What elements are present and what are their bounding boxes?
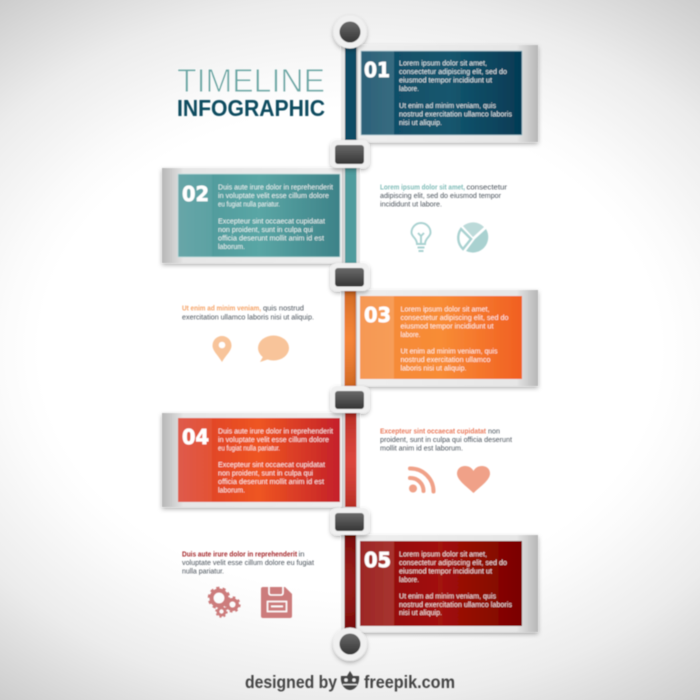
number 03: 03 bbox=[364, 303, 391, 327]
text block 05: consectetur adipiscing elit, sed do bbox=[399, 560, 507, 567]
title: TIMELINE bbox=[177, 62, 325, 99]
text block 03: laboris nisi ut aliquip. bbox=[400, 366, 467, 372]
connector 2 bbox=[331, 263, 369, 291]
side text: step 02: consectetur bbox=[466, 184, 508, 192]
side text: step 04 bbox=[380, 428, 512, 452]
side text: step 05: voluptate velit esse cillum dolore eu fugiat bbox=[182, 560, 314, 567]
panel: step 04 bbox=[162, 413, 342, 507]
text block 04: Duis aute irure dolor in reprehenderit bbox=[218, 428, 333, 436]
text block 03: nostrud exercitation ullamco bbox=[400, 357, 491, 364]
side text: step 05: in bbox=[298, 552, 305, 558]
text block 01: Ut enim ad minim veniam, quis bbox=[399, 103, 497, 110]
icon: map pin bbox=[212, 336, 232, 362]
text block 01: eiusmod tempor incididunt ut bbox=[399, 78, 492, 84]
number 01: 01 bbox=[364, 58, 390, 82]
text block 01: labore. bbox=[399, 86, 419, 93]
text block 05 bbox=[399, 552, 513, 617]
side text: step 02: Lorem ipsum dolor sit amet, bbox=[380, 184, 465, 192]
connector 3 bbox=[331, 386, 369, 413]
panel: step 01 bbox=[358, 45, 538, 142]
panel: step 03 bbox=[357, 290, 538, 386]
icon: light bulb bbox=[412, 223, 430, 251]
connector 1 bbox=[331, 140, 369, 168]
text block 03: Ut enim ad minim veniam, quis bbox=[400, 348, 498, 356]
title: INFOGRAPHIC bbox=[177, 95, 325, 121]
text block 02: officia deserunt mollit anim id est bbox=[218, 236, 324, 242]
icon: floppy disk bbox=[261, 587, 292, 618]
icon: bottom timeline node bbox=[334, 628, 366, 660]
side text: step 05 bbox=[182, 552, 314, 576]
number 04: 04 bbox=[182, 425, 209, 449]
title bbox=[177, 62, 325, 121]
text block 02: laborum. bbox=[218, 244, 245, 251]
text block 04: officia deserunt mollit anim id est bbox=[218, 479, 324, 486]
text block 02: in voluptate velit esse cillum dolore bbox=[218, 193, 329, 200]
text block 05: Ut enim ad minim veniam, quis bbox=[399, 594, 497, 600]
text block 02 bbox=[218, 184, 333, 251]
side text: step 03 bbox=[182, 306, 314, 322]
icon: speech bubble bbox=[258, 336, 289, 362]
panel: step 05 bbox=[357, 535, 538, 632]
text block 01: consectetur adipiscing elit, sed do bbox=[399, 69, 507, 76]
text block 03 bbox=[400, 306, 509, 372]
icon: pie chart bbox=[458, 222, 488, 253]
text block 03: consectetur adipiscing elit, sed do bbox=[400, 315, 509, 322]
text block 01: Lorem ipsum dolor sit amet, bbox=[399, 60, 487, 68]
text block 03: eiusmod tempor incididunt ut bbox=[400, 324, 494, 330]
connector 4 bbox=[331, 508, 369, 535]
text block 05: nisi ut aliquip. bbox=[399, 610, 442, 617]
text block 04: in voluptate velit esse cillum dolore bbox=[218, 437, 329, 444]
text block 05: Lorem ipsum dolor sit amet, bbox=[399, 552, 487, 558]
footer credit: freepik.com bbox=[364, 672, 455, 692]
text block 01: nostrud exercitation ullamco laboris bbox=[399, 112, 513, 118]
footer credit: designed by bbox=[245, 672, 337, 692]
text block 02: non proident, sunt in culpa qui bbox=[218, 227, 313, 234]
side text: step 02: incididunt ut labore. bbox=[380, 202, 442, 208]
text block 05: labore. bbox=[399, 577, 419, 584]
text block 02: Excepteur sint occaecat cupidatat bbox=[218, 218, 325, 226]
side text: step 04: non bbox=[488, 428, 500, 436]
number 05: 05 bbox=[364, 548, 391, 572]
number 02: 02 bbox=[182, 182, 209, 206]
side text: step 05: Duis aute irure dolor in reprehenderit bbox=[182, 552, 298, 558]
text block 02: eu fugiat nulla pariatur. bbox=[218, 202, 280, 208]
icon: rss feed bbox=[409, 468, 434, 492]
footer credit bbox=[245, 671, 455, 692]
icon: top timeline node bbox=[334, 16, 366, 48]
side text: step 04: mollit anim id est laborum. bbox=[380, 446, 463, 452]
text block 04: non proident, sunt in culpa qui bbox=[218, 470, 313, 478]
text block 05: eiusmod tempor incididunt ut bbox=[399, 568, 492, 576]
side text: step 02: adipiscing elit, sed do eiusmod tempor bbox=[380, 193, 502, 200]
side text: step 03: Ut enim ad minim veniam, bbox=[182, 306, 261, 312]
side text: step 05: nulla pariatur. bbox=[182, 568, 224, 576]
side text: step 04: proident, sunt in culpa qui officia deserunt bbox=[380, 437, 512, 444]
timeline spine bbox=[341, 44, 360, 634]
text block 04: Excepteur sint occaecat cupidatat bbox=[218, 462, 325, 469]
panel: step 02 bbox=[162, 168, 342, 263]
side text: step 02 bbox=[380, 184, 508, 208]
text block 04 bbox=[218, 428, 333, 494]
text block 05: nostrud exercitation ullamco laboris bbox=[399, 602, 513, 609]
text block 03: labore. bbox=[400, 332, 421, 339]
infographic content bbox=[162, 16, 538, 692]
text block 01: nisi ut aliquip. bbox=[399, 120, 442, 127]
icon: gears bbox=[209, 588, 240, 617]
text block 03: Lorem ipsum dolor sit amet, bbox=[400, 306, 490, 314]
icon: heart bbox=[457, 466, 490, 493]
side text: step 03: exercitation ullamco laboris nisi ut aliquip. bbox=[182, 314, 314, 322]
side text: step 03: quis nostrud bbox=[263, 306, 304, 312]
text block 04: eu fugiat nulla pariatur. bbox=[218, 446, 280, 452]
text block 04: laborum. bbox=[218, 488, 245, 494]
text block 01 bbox=[399, 60, 513, 127]
icon: freepik logo bbox=[341, 671, 359, 690]
text block 02: Duis aute irure dolor in reprehenderit bbox=[218, 184, 333, 192]
side text: step 04: Excepteur sint occaecat cupidatat bbox=[380, 428, 487, 436]
